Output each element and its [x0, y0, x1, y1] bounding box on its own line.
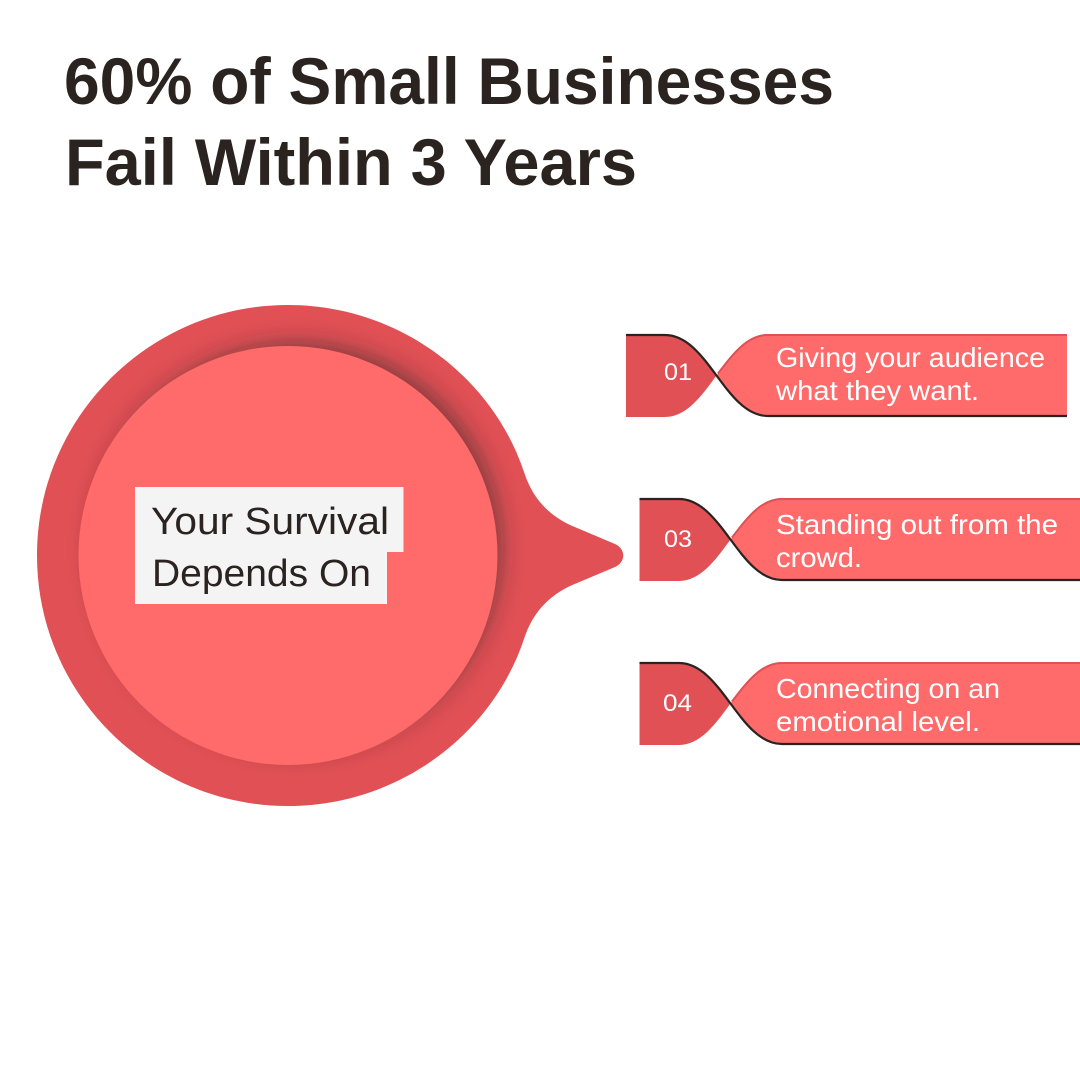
ribbon 03 number: 03: [664, 526, 692, 553]
ribbon 03: [640, 498, 1080, 581]
ribbon 04: [640, 662, 1080, 745]
ribbon 01 number tab: [626, 334, 716, 417]
ribbon 04 text: Connecting on an: [776, 673, 1000, 704]
title: [64, 44, 834, 199]
ribbon 03 text: crowd.: [776, 542, 862, 573]
speech-bubble circle: [37, 305, 623, 806]
ribbon 01 text: [775, 342, 1045, 406]
ribbon 03 text panel: [730, 498, 1080, 580]
outer ring with pointer: [37, 305, 623, 806]
ribbon 01 text: Giving your audience: [776, 342, 1045, 373]
ribbon 03 number tab: [640, 498, 730, 581]
ribbon 03 black line: [640, 499, 1080, 580]
ribbon 04 number: 04: [663, 690, 692, 717]
ribbon 04 black line: [640, 663, 1080, 744]
title: Fail Within 3 Years: [65, 125, 637, 199]
ribbon 03 text: Standing out from the: [776, 509, 1058, 540]
ribbon 01 text panel: [716, 334, 1067, 416]
title: 60% of Small Businesses: [64, 44, 834, 118]
label text: [151, 501, 389, 595]
inner circle: [78, 346, 498, 765]
label text: Depends On: [152, 553, 371, 595]
ribbon 04 text panel: [730, 662, 1080, 744]
ribbon 04 text: [776, 673, 1000, 737]
infographic canvas: [37, 56, 1080, 806]
label text: Your Survival: [151, 501, 389, 543]
ribbon 01: [626, 334, 1067, 417]
ribbon 03 text: [776, 509, 1058, 573]
ribbon 01 black line: [626, 335, 1067, 416]
label background: [135, 487, 404, 604]
ribbon 04 text: emotional level.: [776, 706, 980, 737]
inner circle shadow: [91, 341, 503, 753]
ribbon 01 number: 01: [664, 359, 692, 386]
ribbon 04 number tab: [640, 662, 730, 745]
center label: Your Survival Depends On: [135, 487, 404, 604]
ribbon 01 text: what they want.: [775, 375, 979, 406]
